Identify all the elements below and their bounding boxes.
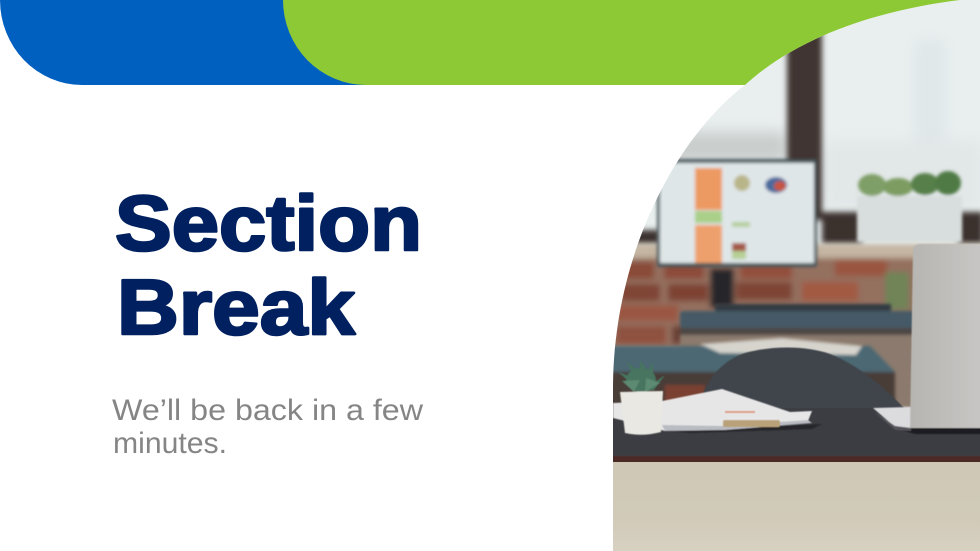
title: Section Break: Section: [115, 179, 422, 267]
potted succulent: [618, 360, 665, 435]
beige foreground: [600, 462, 980, 551]
blurred brick wall: [600, 244, 980, 350]
papers on clipboard: [613, 389, 822, 433]
middle table with papers: [600, 338, 895, 412]
blurred monitor: [657, 159, 817, 267]
photo: office desk scene: [600, 0, 980, 551]
subtitle text: [112, 394, 423, 460]
top banner: green shape: [283, 0, 960, 85]
top banner: blue shape: [0, 0, 400, 85]
chair back: [698, 348, 906, 410]
title: Section Break: Break: [117, 263, 356, 351]
laptop: [873, 244, 980, 434]
blurred planter with plants: [857, 171, 962, 242]
back counter: [680, 304, 915, 408]
front desk: [600, 408, 980, 463]
subtitle text: We’ll be back in a few: [112, 394, 423, 427]
blurred window background: [600, 0, 980, 250]
subtitle text: minutes.: [113, 427, 227, 460]
title: Section Break: [115, 179, 422, 351]
